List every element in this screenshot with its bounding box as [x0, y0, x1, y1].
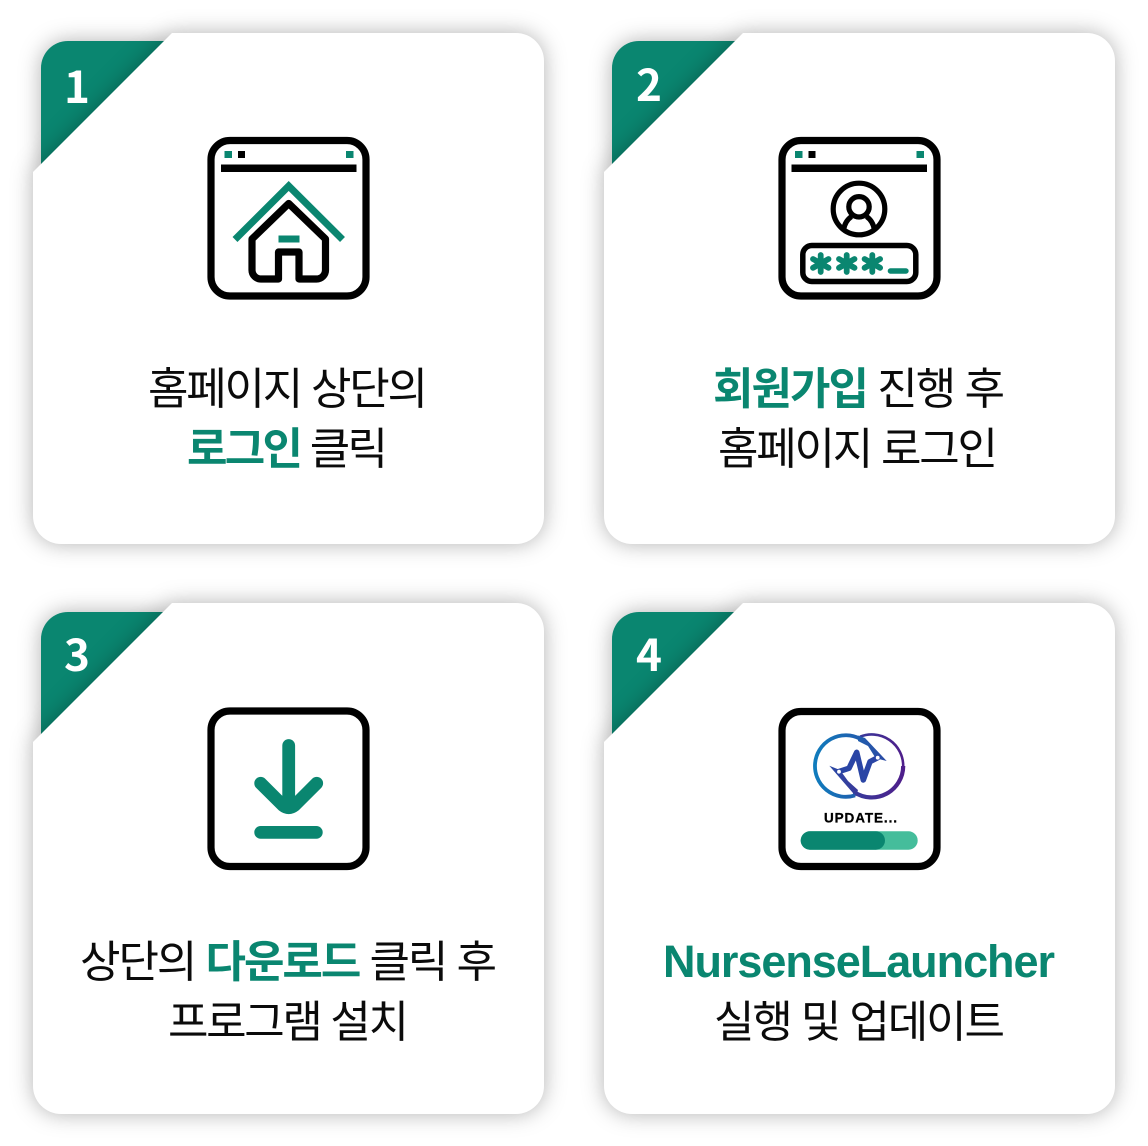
card 4 background: [604, 603, 1115, 1114]
step 2 text: 홈페이지 로그인: [718, 425, 998, 474]
card 1 background: [33, 33, 544, 544]
step 3 text: 상단의 다운로드 클릭 후: [80, 938, 497, 987]
step 4 number: 4: [636, 620, 662, 684]
card 3 background: [33, 603, 544, 1114]
step 2 text: [713, 365, 1005, 474]
step 2 number: 2: [636, 50, 662, 114]
step 1 number: 1: [64, 52, 90, 116]
number tab 3: [41, 612, 172, 742]
logo: [815, 734, 903, 797]
step 1 text: [148, 365, 428, 474]
step 3 text: 프로그램 설치: [168, 998, 409, 1047]
panel: step 2: [604, 33, 1115, 544]
panel: step 4: [604, 603, 1115, 1114]
number tab 2: [612, 41, 743, 172]
card 2 background: [604, 33, 1115, 544]
number tab 4: [612, 612, 743, 742]
step 1 text: 로그인 클릭: [187, 425, 388, 474]
step 3 text: [80, 938, 497, 1047]
panel: step 3: [33, 603, 544, 1114]
icon: launcher update: UPDATE...: [824, 810, 897, 826]
number tab 1: [41, 41, 172, 172]
step 4 text: 실행 및 업데이트: [714, 998, 1005, 1047]
icon: browser login: [782, 140, 937, 296]
progress bar: [801, 831, 918, 850]
step 3 number: 3: [64, 620, 90, 684]
icon: launcher update: [782, 712, 937, 866]
panel: step 1: [33, 33, 544, 544]
step 4 text: [663, 936, 1055, 1047]
icon: download: [211, 711, 366, 866]
step 4 text: NursenseLauncher: [663, 936, 1055, 987]
step 1 text: 홈페이지 상단의: [148, 365, 428, 414]
step 2 text: 회원가입 진행 후: [713, 365, 1005, 414]
icon: browser home: [211, 140, 366, 296]
